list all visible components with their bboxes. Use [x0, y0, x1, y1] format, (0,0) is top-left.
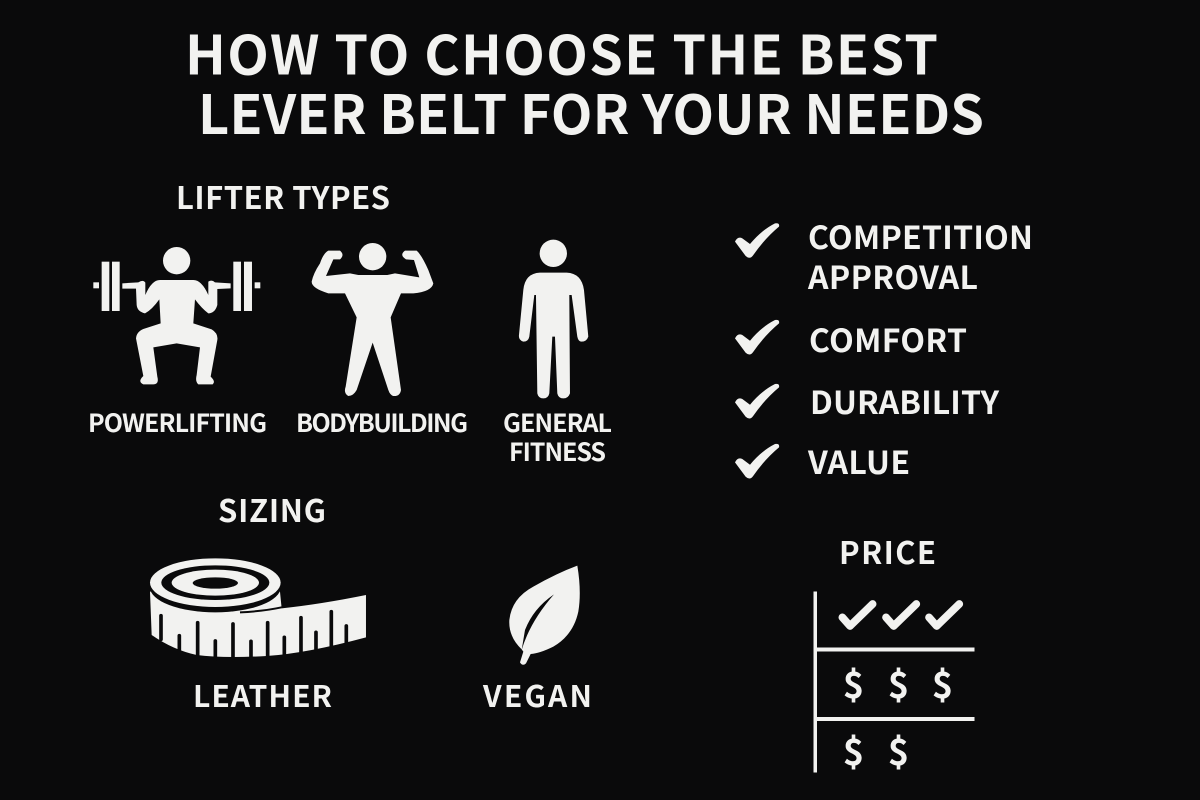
- row: two dollars: $: [843, 724, 864, 776]
- label: general fitness: GENERAL: [503, 404, 612, 440]
- label: leather: LEATHER: [193, 672, 332, 716]
- checklist: durability: [735, 378, 999, 424]
- icon: check: [735, 444, 779, 478]
- icon: bodybuilding figure: [312, 243, 433, 396]
- label: vegan: VEGAN: [482, 672, 592, 716]
- row: three checks: [842, 604, 959, 626]
- heading: price: PRICE: [839, 528, 936, 573]
- row: three dollars: $: [843, 657, 864, 709]
- checklist: value: [735, 438, 910, 484]
- label: value: VALUE: [807, 438, 910, 484]
- title: HOW TO CHOOSE THE BEST: [185, 12, 938, 90]
- label: competition approval: [807, 213, 1033, 299]
- icon: check: [735, 384, 779, 418]
- row: three dollars: $: [888, 657, 909, 709]
- label: competition approval: APPROVAL: [807, 253, 978, 299]
- icon: leaf: [509, 566, 580, 665]
- label: competition approval: COMPETITION: [808, 213, 1033, 259]
- checklist: comfort: [735, 316, 967, 362]
- label: general fitness: FITNESS: [509, 433, 606, 469]
- chart axes: [814, 592, 974, 772]
- heading: sizing: SIZING: [218, 486, 326, 531]
- price chart: [814, 592, 974, 776]
- icon: measuring tape: [150, 558, 366, 659]
- heading: lifter types: LIFTER TYPES: [176, 173, 390, 218]
- label: comfort: COMFORT: [809, 316, 967, 362]
- icon: powerlifting squat figure: [93, 247, 260, 384]
- title: LEVER BELT FOR YOUR NEEDS: [198, 71, 984, 150]
- label: general fitness: [503, 404, 612, 469]
- icon: check: [735, 223, 779, 258]
- icon: check: [735, 320, 779, 354]
- row: two dollars: $: [888, 724, 909, 776]
- label: durability: DURABILITY: [810, 378, 999, 424]
- row: two dollars: [843, 724, 909, 776]
- checklist: competition approval: [735, 213, 1033, 299]
- label: powerlifting: POWERLIFTING: [88, 404, 267, 440]
- icon: general fitness figure: [519, 240, 588, 398]
- row: three dollars: $: [932, 657, 953, 709]
- label: bodybuilding: BODYBUILDING: [296, 404, 468, 440]
- title: [185, 12, 984, 150]
- row: three dollars: [843, 657, 953, 709]
